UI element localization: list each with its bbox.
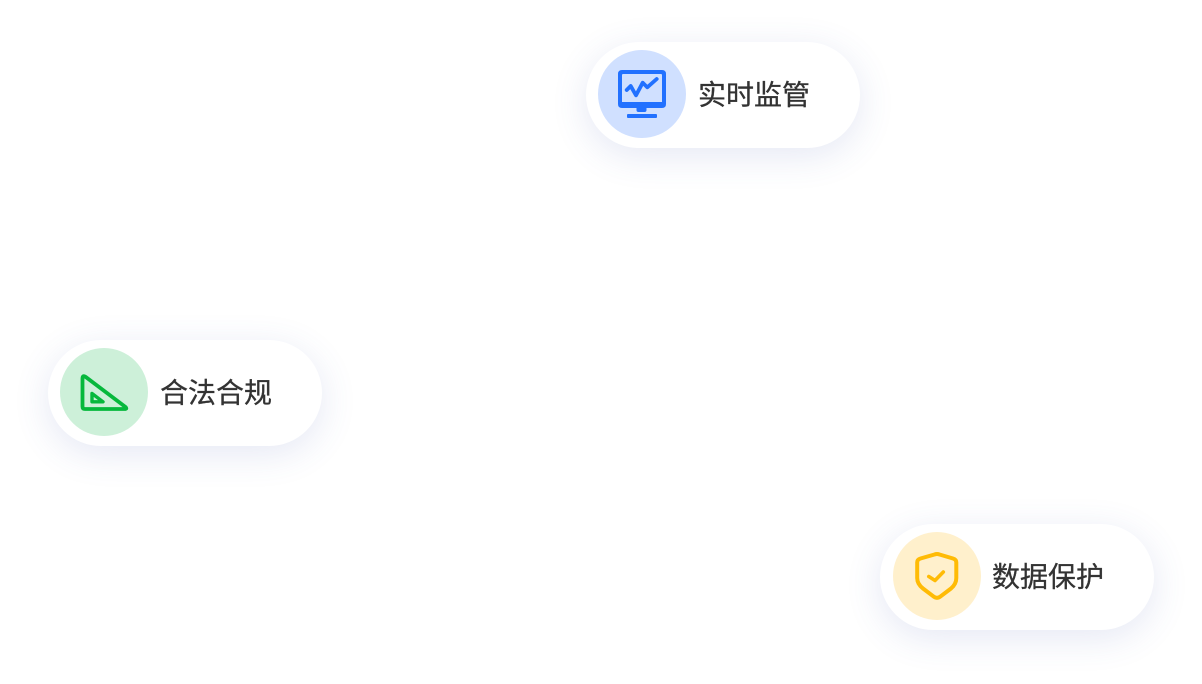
icon: shield with check (893, 532, 981, 620)
pill: real-time monitoring (586, 42, 860, 148)
icon: monitor with trend line (598, 50, 686, 138)
label: real-time monitoring: 实时监管 (698, 80, 810, 110)
icon: set square (60, 348, 148, 436)
pill: data protection (880, 524, 1154, 630)
label: data protection: 数据保护 (992, 562, 1104, 592)
label: legal compliance: 合法合规 (160, 378, 272, 408)
pill: legal compliance (48, 340, 322, 446)
